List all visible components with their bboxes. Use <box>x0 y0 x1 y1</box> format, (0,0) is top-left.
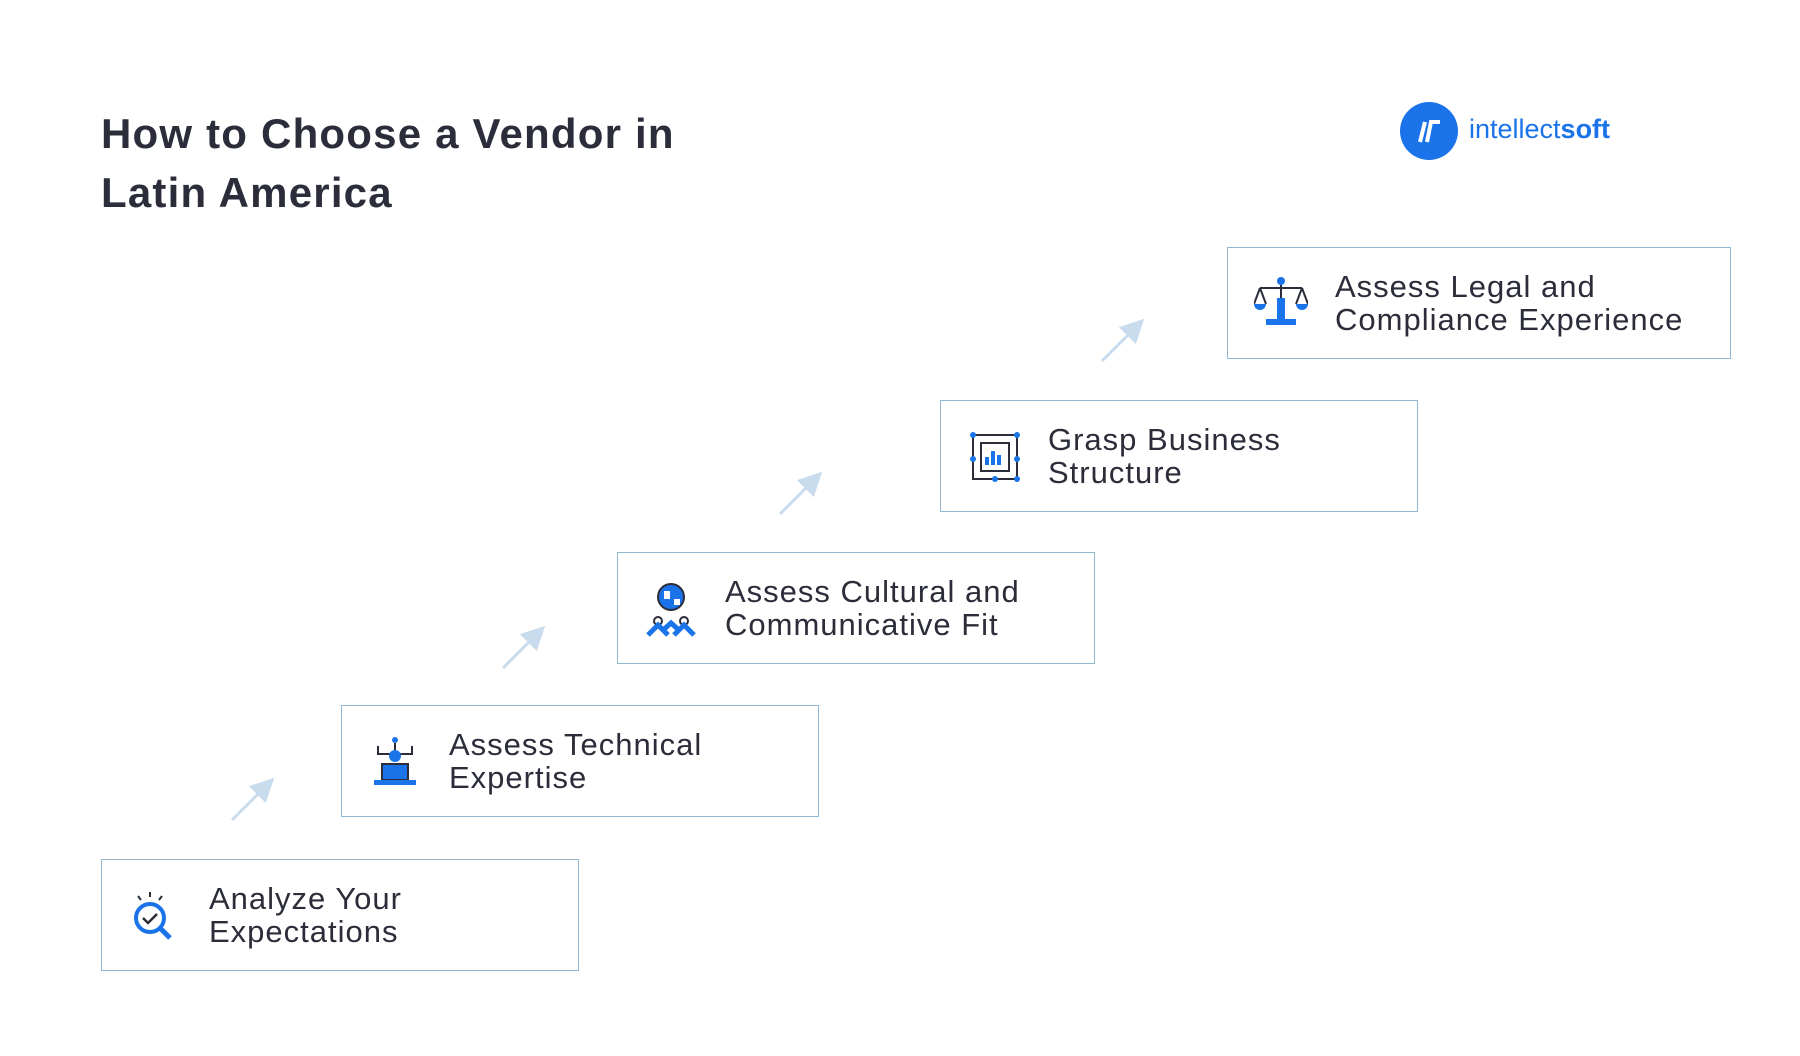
title: How to Choose a Vendor in <box>101 110 675 157</box>
step 3: Assess Cultural and <box>725 574 1020 609</box>
icon: business structure <box>970 432 1020 482</box>
icon: scales <box>1254 277 1308 325</box>
icon: magnifier <box>134 892 172 940</box>
step 5 <box>1227 247 1731 359</box>
step 2 <box>341 705 819 817</box>
step 2: Assess Technical <box>449 727 702 762</box>
logo <box>1400 102 1610 160</box>
step 4: Grasp Business <box>1048 422 1281 457</box>
icon: technical <box>374 737 416 785</box>
step 3 <box>617 552 1095 664</box>
step 4: Structure <box>1048 455 1183 490</box>
step 3: Communicative Fit <box>725 607 999 642</box>
step 4 <box>940 400 1418 512</box>
step 5: Assess Legal and <box>1335 269 1596 304</box>
title: Latin America <box>101 169 393 216</box>
step 5: Compliance Experience <box>1335 302 1683 337</box>
title <box>101 110 675 216</box>
step 1: Analyze Your <box>209 881 402 916</box>
step 1 <box>101 859 579 971</box>
step 2: Expertise <box>449 760 587 795</box>
icon: globe people <box>646 583 696 637</box>
logo: intellectsoft <box>1469 114 1610 144</box>
step 1: Expectations <box>209 914 398 949</box>
